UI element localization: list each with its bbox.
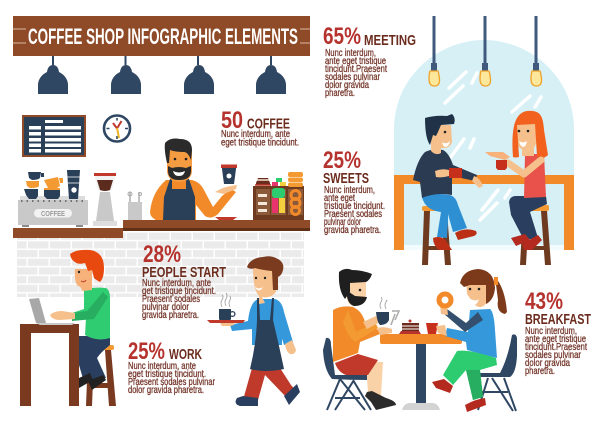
25% work text: Praesent sodales pulvinar bbox=[128, 377, 215, 388]
shirt bbox=[333, 306, 380, 362]
pendant bulbs bbox=[429, 16, 542, 86]
counter right bbox=[123, 220, 310, 231]
28% people start text: Praesent sodales bbox=[142, 294, 200, 305]
50 coffee text: Nunc interdum, ante bbox=[221, 129, 290, 140]
title banner bbox=[13, 16, 310, 56]
28% people start text bbox=[142, 241, 226, 321]
leg bbox=[367, 362, 383, 398]
65% meeting text bbox=[323, 23, 416, 99]
43% breakfast text: Nunc interdum, bbox=[525, 326, 577, 337]
green trousers bbox=[443, 351, 497, 400]
utensil holder bbox=[128, 192, 142, 225]
65% meeting text: dolor gravida bbox=[325, 80, 369, 91]
cake on table bbox=[399, 320, 421, 334]
25% sweets text: 25% bbox=[323, 147, 361, 174]
25% sweets text: pulvinar dolor bbox=[324, 217, 361, 228]
coffee cup with steam bbox=[219, 309, 231, 320]
waitress sweater and arms bbox=[230, 299, 293, 345]
28% people start text: pulvinar dolor bbox=[142, 302, 190, 313]
arm bbox=[508, 160, 541, 174]
43% breakfast text: dolor gravida bbox=[525, 358, 570, 369]
50 coffee text: eget tristique tincidunt. bbox=[221, 138, 299, 148]
shoes bbox=[511, 234, 542, 250]
43% breakfast text: sodales pulvinar bbox=[525, 350, 582, 361]
brick wall bbox=[17, 232, 304, 297]
fork bbox=[391, 311, 399, 325]
counter left bbox=[13, 228, 123, 238]
25% work text: dolor gravida pharetra. bbox=[128, 385, 204, 396]
trousers bbox=[509, 196, 547, 240]
cafe bar table bbox=[394, 175, 574, 250]
eyes and smile bbox=[518, 130, 520, 132]
65% meeting text: pharetra. bbox=[325, 88, 355, 99]
man at bar bbox=[413, 114, 483, 265]
25% sweets text: Praesent sodales bbox=[324, 209, 382, 220]
pastry display bbox=[253, 172, 304, 220]
65% meeting text: MEETING bbox=[364, 32, 416, 49]
other hand bbox=[485, 152, 510, 160]
head bbox=[431, 125, 452, 154]
tray bbox=[207, 320, 245, 323]
chair bbox=[478, 334, 517, 411]
woman at table bbox=[432, 269, 517, 412]
25% sweets text bbox=[323, 147, 385, 236]
stool bbox=[520, 205, 551, 265]
breakfast table bbox=[380, 334, 462, 410]
hand bbox=[436, 305, 448, 336]
43% breakfast text: 43% bbox=[525, 288, 563, 315]
65% meeting text: 65% bbox=[323, 23, 361, 50]
65% meeting text: sodales pulvinar bbox=[325, 72, 381, 83]
arched window bbox=[394, 40, 574, 250]
hand bbox=[50, 311, 75, 320]
wall clock bbox=[104, 116, 130, 142]
50 coffee text: 50 bbox=[221, 107, 243, 134]
donut bbox=[439, 294, 451, 306]
barista face bbox=[167, 150, 192, 182]
43% breakfast text: pharetra. bbox=[525, 366, 555, 377]
takeaway cup bbox=[222, 167, 236, 184]
hands and cup bbox=[472, 176, 483, 188]
top bbox=[524, 154, 546, 198]
coffee grinder bbox=[93, 173, 117, 226]
25% work text bbox=[128, 338, 215, 396]
shoes bbox=[79, 373, 106, 390]
trousers bbox=[79, 336, 110, 382]
apron bbox=[250, 298, 284, 371]
woman at bar bbox=[485, 111, 551, 265]
hands bbox=[363, 316, 392, 335]
hand bbox=[285, 340, 296, 354]
25% sweets text: gravida pharetra. bbox=[324, 225, 381, 236]
28% people start text: PEOPLE START bbox=[142, 264, 226, 281]
desk bbox=[20, 324, 79, 406]
neck and face bbox=[522, 146, 534, 156]
trousers bbox=[422, 194, 467, 238]
28% people start text: gravida pharetra. bbox=[142, 310, 199, 321]
50 coffee text: COFFEE bbox=[247, 116, 290, 132]
head bbox=[345, 280, 366, 306]
laptop bbox=[29, 298, 46, 323]
barista arm and body bbox=[150, 180, 236, 220]
waitress bbox=[207, 256, 300, 406]
stacked cups bbox=[24, 170, 80, 199]
cup bbox=[496, 160, 507, 170]
stool bbox=[422, 206, 451, 265]
hanging lamps bbox=[38, 56, 286, 94]
man at table bbox=[323, 269, 399, 410]
torso bbox=[413, 149, 477, 198]
barista bbox=[150, 138, 237, 220]
chalkboard menu bbox=[22, 115, 86, 157]
25% work text: eget tristique tincidunt. bbox=[128, 369, 206, 380]
25% sweets text: ante eget bbox=[324, 193, 355, 204]
blue shirt bbox=[445, 309, 497, 358]
25% work text: 25% bbox=[128, 338, 165, 365]
head bbox=[466, 280, 488, 307]
28% people start text: 28% bbox=[143, 241, 181, 268]
28% people start text: Nunc interdum, ante bbox=[142, 278, 211, 289]
25% sweets text: tristique tincidunt. bbox=[324, 201, 385, 212]
25% work text: Nunc interdum, ante bbox=[128, 361, 196, 372]
50 coffee text bbox=[221, 107, 299, 148]
coffee machine bbox=[18, 196, 88, 227]
stool bbox=[86, 345, 116, 406]
sweater bbox=[72, 288, 110, 339]
mug and steam bbox=[376, 312, 389, 325]
hair bbox=[512, 111, 548, 158]
shoes bbox=[365, 391, 396, 410]
shoes bbox=[432, 379, 486, 412]
title: COFFEE SHOP INFOGRAPHIC ELEMENTS bbox=[28, 24, 298, 49]
navy sleeve bbox=[443, 309, 483, 332]
43% breakfast text bbox=[525, 288, 591, 377]
28% people start text: get tristique tincidunt. bbox=[142, 286, 216, 297]
red cup bbox=[426, 323, 438, 334]
shoes bbox=[433, 229, 477, 250]
25% sweets text: SWEETS bbox=[323, 170, 369, 187]
25% sweets text: Nunc interdum, bbox=[324, 185, 375, 196]
waitress legs bbox=[243, 368, 297, 400]
waitress shoes bbox=[236, 384, 300, 406]
65% meeting text: Nunc interdum, bbox=[325, 48, 376, 59]
25% work text: WORK bbox=[169, 346, 202, 363]
saucer bbox=[215, 217, 237, 220]
chair bbox=[323, 338, 371, 410]
person with laptop bbox=[20, 250, 116, 406]
head bbox=[75, 269, 92, 291]
shorts bbox=[335, 354, 378, 375]
arm bbox=[343, 310, 378, 342]
waitress head bbox=[253, 268, 276, 304]
65% meeting text: ante eget tristique bbox=[325, 56, 386, 67]
coffee machine label: COFFEE bbox=[41, 209, 65, 218]
65% meeting text: tincidunt.Praesent bbox=[325, 64, 387, 75]
